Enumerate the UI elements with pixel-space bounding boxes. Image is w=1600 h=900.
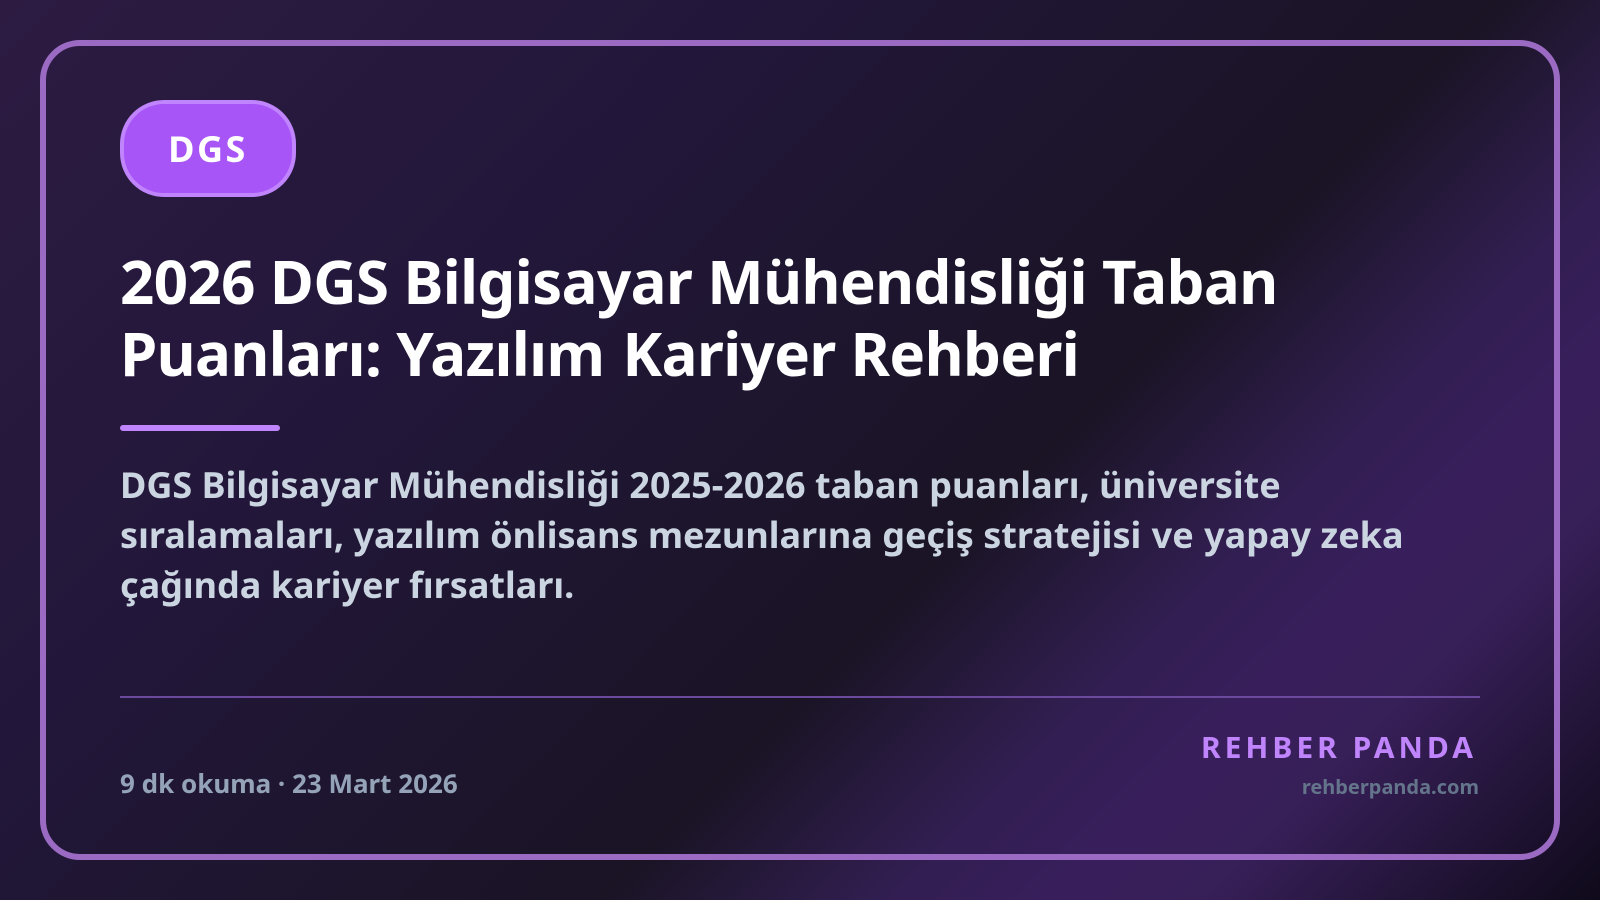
brand name: REHBER PANDA — [1201, 726, 1477, 767]
title — [120, 240, 1278, 394]
badge: DGS — [120, 100, 296, 197]
website: rehberpanda.com — [1302, 773, 1479, 800]
description text: sıralamaları, yazılım önlisans mezunlarına geçiş stratejisi ve yapay zeka — [120, 510, 1404, 559]
title: 2026 DGS Bilgisayar Mühendisliği Taban — [120, 240, 1278, 322]
description text — [120, 460, 1404, 609]
reading time and date: 9 dk okuma · 23 Mart 2026 — [120, 765, 458, 801]
footer divider — [120, 696, 1480, 698]
accent line — [120, 425, 280, 431]
description text: DGS Bilgisayar Mühendisliği 2025-2026 taban puanları, üniversite — [120, 460, 1281, 509]
description text: çağında kariyer fırsatları. — [120, 560, 574, 609]
title: Puanları: Yazılım Kariyer Rehberi — [120, 312, 1079, 394]
badge: DGS: DGS — [168, 124, 248, 173]
